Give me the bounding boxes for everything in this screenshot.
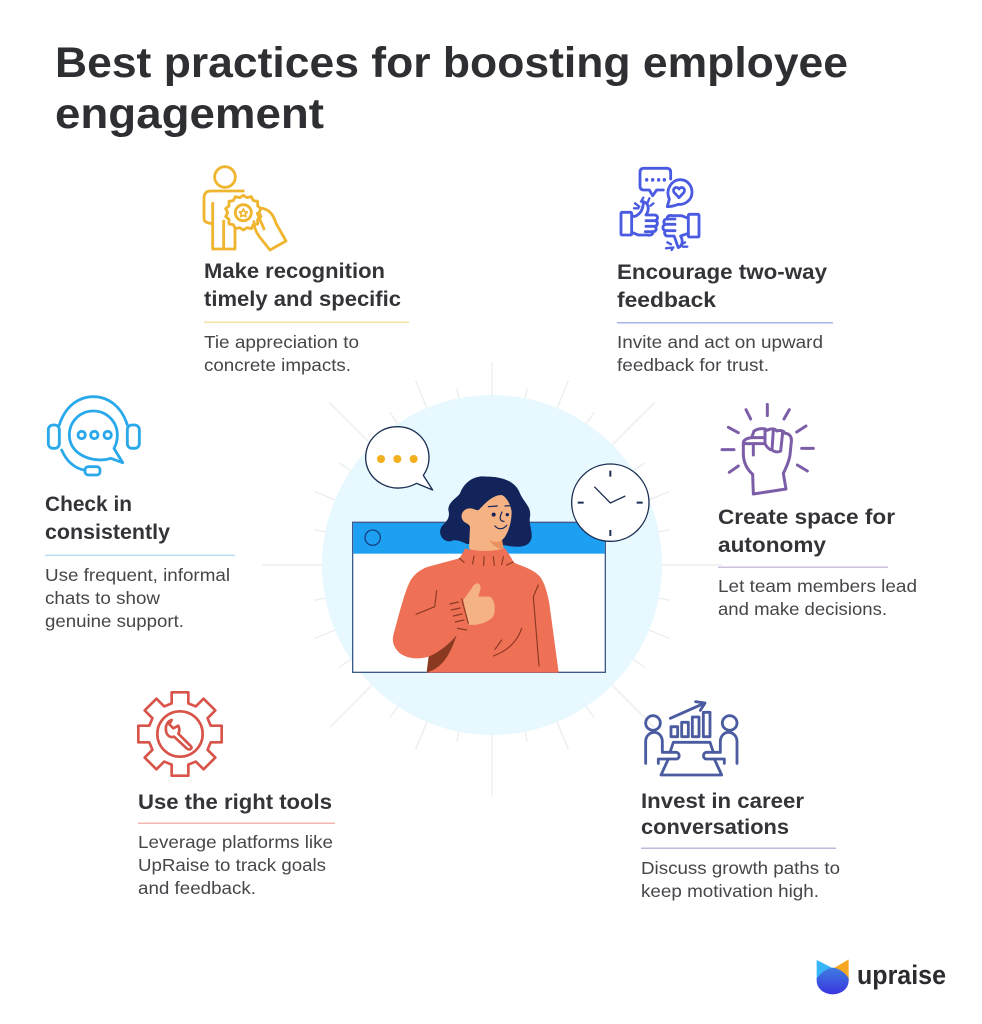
hair <box>440 476 532 547</box>
speech bubble <box>366 427 433 490</box>
logo wordmark: upraise <box>857 960 946 990</box>
heading: conversations <box>641 816 789 839</box>
heading: Use the right tools <box>138 791 332 814</box>
item: make recognition <box>204 167 409 375</box>
icon: raised fist <box>722 404 813 494</box>
description: keep motivation high. <box>641 881 819 901</box>
icon: meeting with growth chart <box>646 702 737 775</box>
description <box>204 332 359 375</box>
heading: Make recognition <box>204 260 385 283</box>
description: feedback for trust. <box>617 355 769 375</box>
central pale blue circle <box>322 395 662 735</box>
title: Best practices for boosting employee <box>55 39 848 87</box>
description <box>45 565 230 631</box>
description: Let team members lead <box>718 576 917 596</box>
heading: Encourage two-way <box>617 261 827 284</box>
heading <box>204 260 401 311</box>
heading <box>45 493 170 544</box>
item: check in consistently <box>45 397 235 631</box>
description: genuine support. <box>45 611 184 631</box>
sunburst rays <box>262 362 722 795</box>
description: Tie appreciation to <box>204 332 359 352</box>
description: and feedback. <box>138 878 256 898</box>
icon: thumbs up and down with chat bubbles <box>621 168 699 250</box>
clock <box>572 464 649 541</box>
item: use the right tools <box>138 692 335 898</box>
description <box>641 858 840 901</box>
description <box>138 832 333 898</box>
logo mark <box>817 959 849 994</box>
neck and face <box>462 495 512 554</box>
heading: Invest in career <box>641 790 804 813</box>
description: concrete impacts. <box>204 355 351 375</box>
icon: gear with wrench <box>138 692 222 776</box>
heading <box>641 790 804 839</box>
upraise logo <box>817 959 946 994</box>
description <box>617 332 823 375</box>
browser window <box>353 522 605 672</box>
heading: feedback <box>617 289 716 312</box>
item: create space for autonomy <box>718 404 917 619</box>
title: engagement <box>55 90 324 138</box>
item: two-way feedback <box>617 168 833 375</box>
description: Leverage platforms like <box>138 832 333 852</box>
description <box>718 576 917 619</box>
sweater <box>393 548 559 673</box>
icon: person receiving badge <box>204 167 286 250</box>
description: and make decisions. <box>718 599 887 619</box>
title <box>55 39 848 138</box>
description: Use frequent, informal <box>45 565 230 585</box>
heading <box>617 261 827 312</box>
description: Invite and act on upward <box>617 332 823 352</box>
hand thumbs up <box>448 583 495 632</box>
heading: consistently <box>45 521 170 544</box>
icon: headset with chat bubble <box>48 397 139 475</box>
illustration: woman in browser window <box>353 427 649 673</box>
description: UpRaise to track goals <box>138 855 326 875</box>
heading <box>718 506 895 557</box>
description: Discuss growth paths to <box>641 858 840 878</box>
description: chats to show <box>45 588 160 608</box>
heading: timely and specific <box>204 288 401 311</box>
heading: autonomy <box>718 534 826 557</box>
heading: Create space for <box>718 506 895 529</box>
item: career conversations <box>641 702 840 901</box>
heading: Check in <box>45 493 132 516</box>
